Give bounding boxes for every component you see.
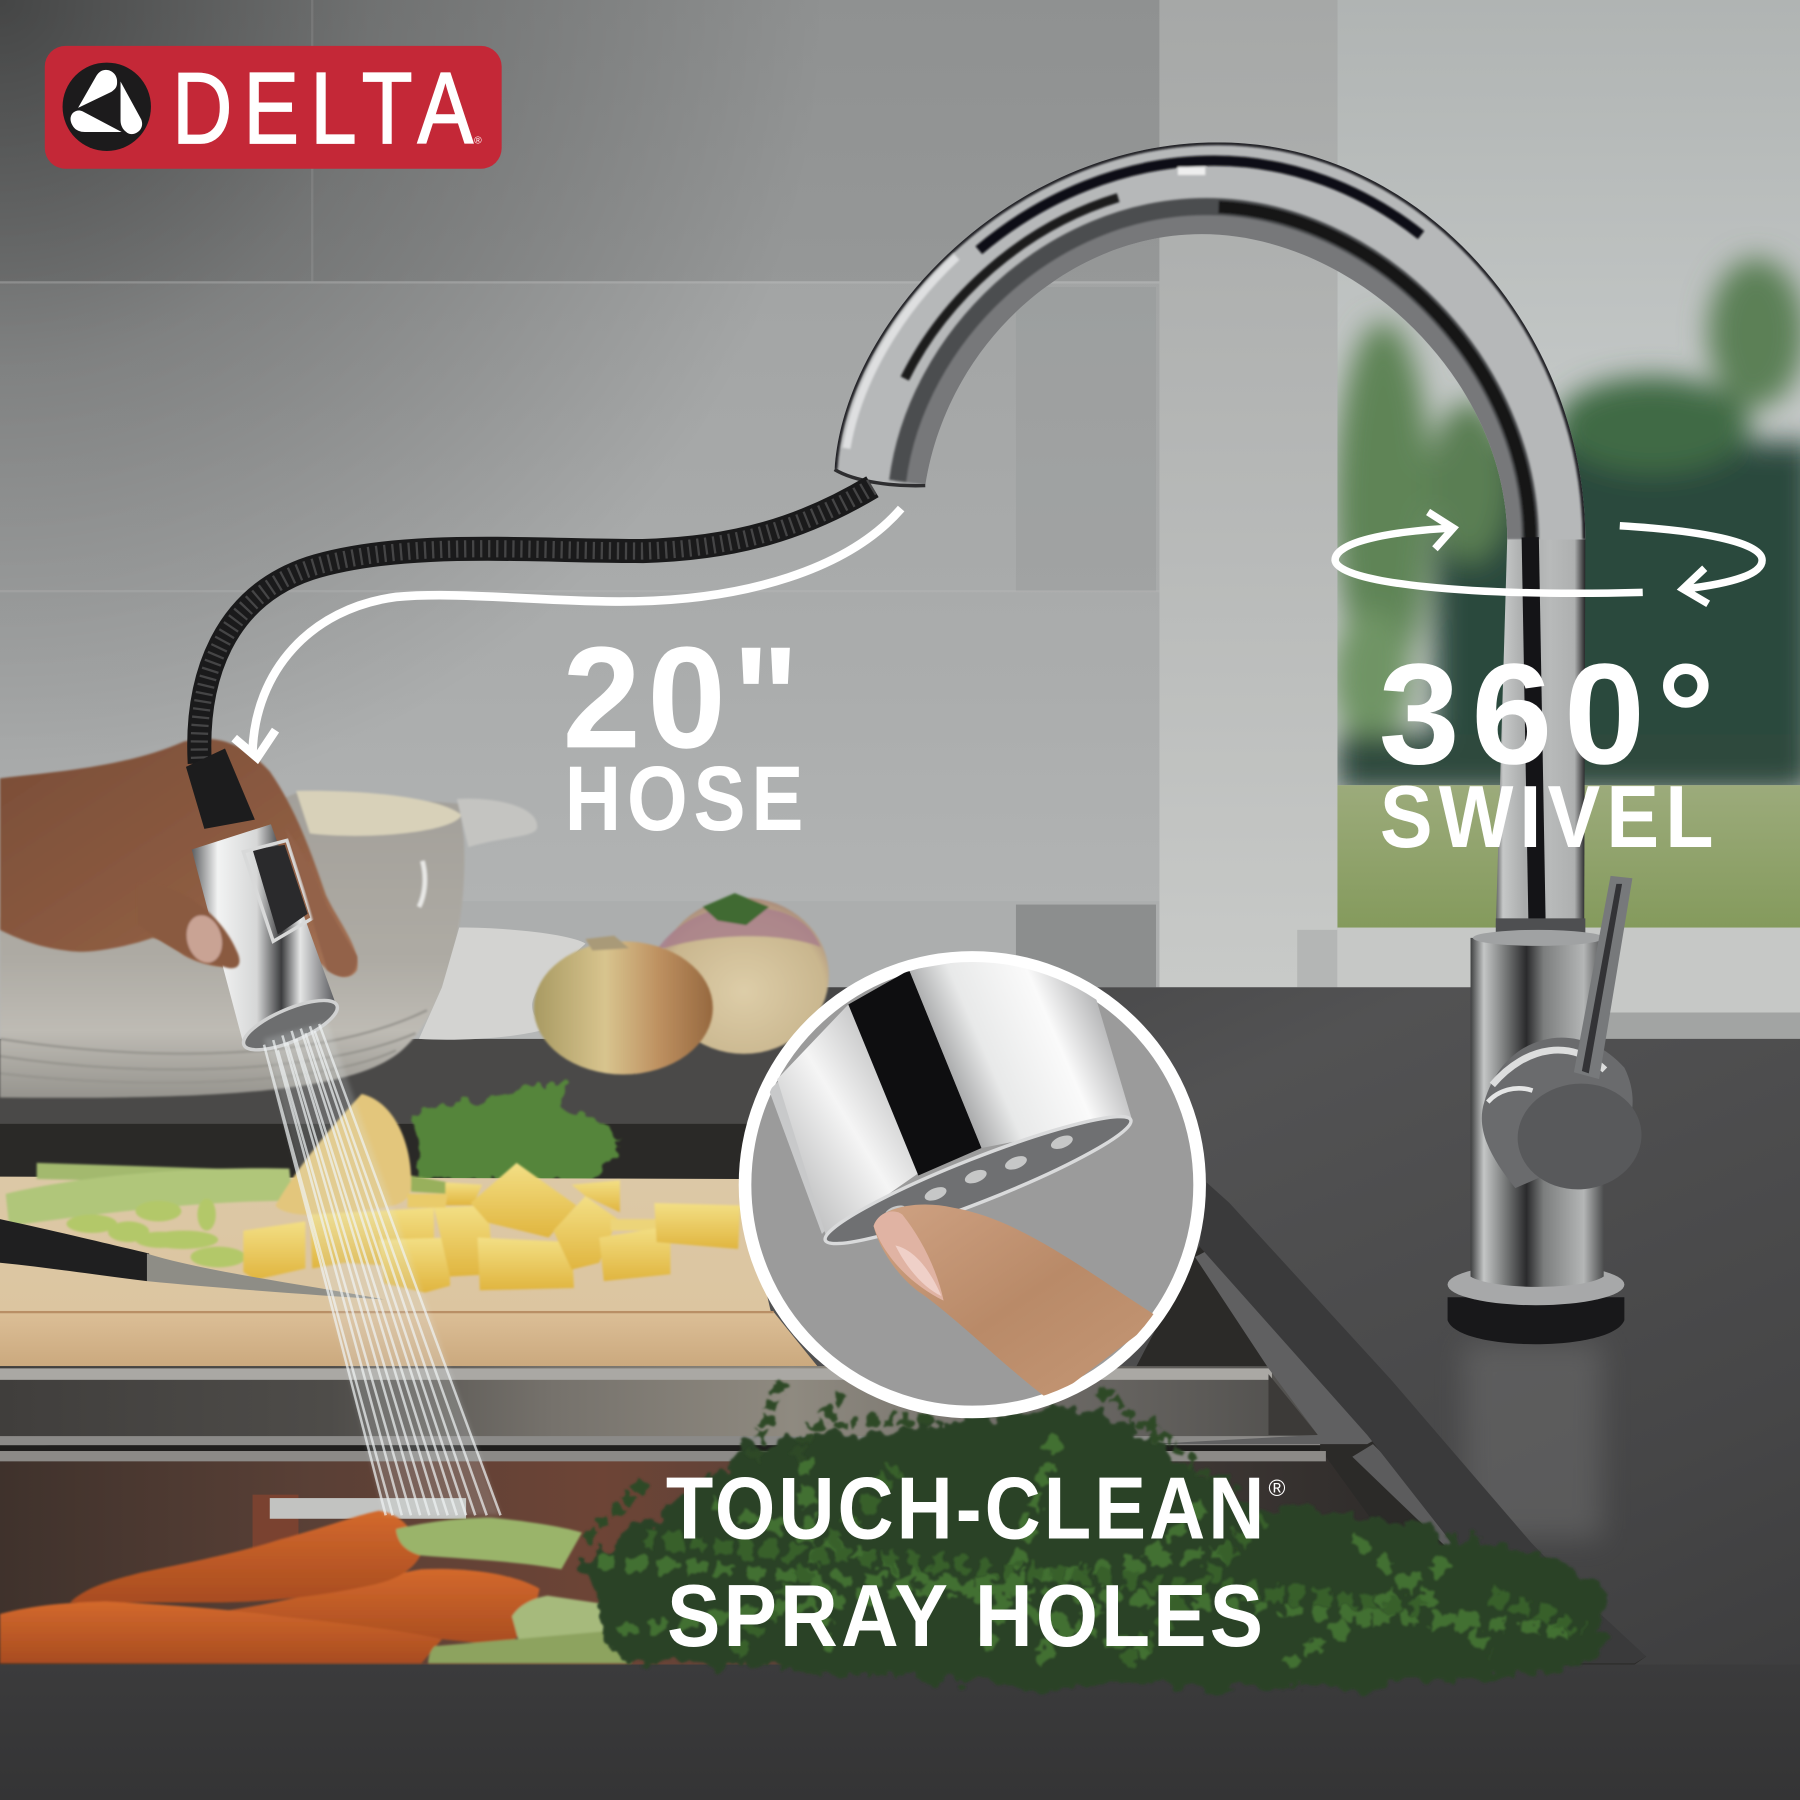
callout: touch-clean spray holes: ® [1268,1475,1285,1501]
zoom circle: touch-clean spray holes [745,941,1200,1412]
callout: touch-clean spray holes: TOUCH-CLEAN [666,1458,1267,1557]
onion [534,936,713,1074]
spout reflections [835,142,1585,540]
spray head [186,748,343,1060]
window pillar [1159,0,1337,987]
callout: 20 inch hose: HOSE [565,748,809,850]
faucet spout [834,142,1586,918]
hose length arrow [234,509,901,758]
potatoes and celery on the board [6,1094,740,1293]
faucet reflection on counter [1464,1343,1601,1538]
fingers over spray head [138,829,357,976]
logo mark petals [71,70,142,134]
celery leaves [416,1081,624,1182]
logo: Delta: DELTA [172,53,484,165]
hose [199,487,872,763]
window sill [1337,928,1800,1041]
background wall [0,0,1800,1148]
right countertop [0,987,1800,1800]
water spray [264,1022,501,1515]
spout tip lip [835,470,925,486]
callout: 360 degree swivel: SWIVEL [1380,767,1720,866]
black reflection continuing down the tube [1530,537,1537,928]
callout: 20 inch hose: 20" [562,616,806,778]
carrots [0,1511,631,1663]
sink outer rim [1200,1182,1646,1663]
metal strip [770,1082,824,1234]
spray face with holes [823,1116,1133,1246]
faucet vertical tube [1496,537,1585,928]
turnip [657,893,829,1054]
faucet handle [1482,876,1646,1194]
callout: 360 degree swivel: 360° [1379,634,1727,794]
faucet base plate [1448,1264,1624,1344]
front counter edge [0,1665,1800,1800]
swivel arrows [1335,512,1762,604]
callout: touch-clean spray holes: SPRAY HOLES [667,1566,1266,1665]
carrot greens [580,1383,1605,1691]
left counter [0,1039,781,1181]
logo: Delta: ® [474,135,482,146]
drain plate [253,1495,466,1550]
cutting board [0,1177,817,1366]
callout: 20 inch hose [562,616,809,850]
logo: Delta [45,46,502,169]
fingertip [874,1205,1159,1401]
faucet body [1471,918,1604,1287]
chrome cylinder [777,1004,918,1238]
callout: touch-clean spray holes [666,1458,1285,1665]
plate [419,928,585,1040]
sink rim flange [1148,1246,1383,1444]
hand [0,739,357,977]
callout: 360 degree swivel [1379,634,1727,866]
sink [0,1182,1646,1665]
pot [0,791,537,1098]
knife [0,1219,385,1299]
window with trees and lawn [1333,0,1800,930]
